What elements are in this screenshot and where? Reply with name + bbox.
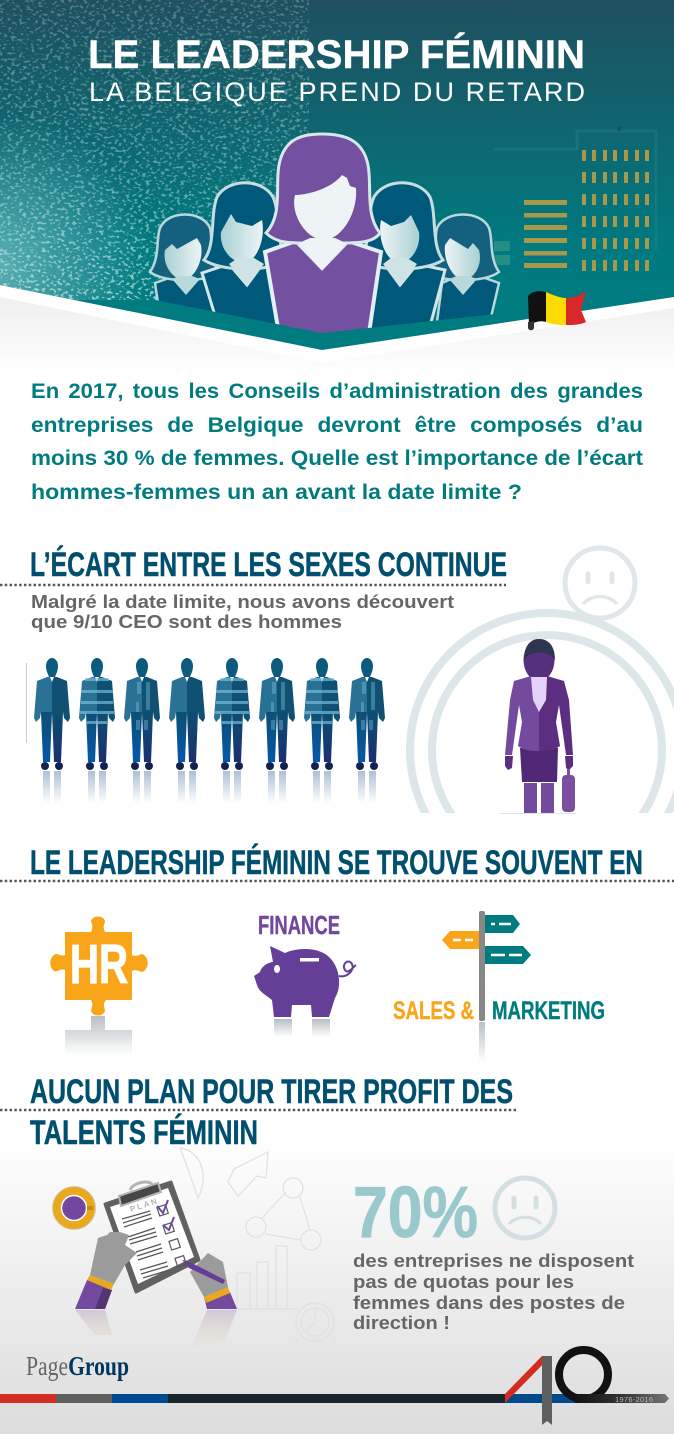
panel: no plan (0, 1073, 634, 1350)
stat description: pas de quotas pour les (353, 1272, 574, 1292)
footer ribbon with 40 years logo (0, 1350, 669, 1425)
label: sales: SALES & (393, 997, 474, 1025)
icon: rings (406, 609, 674, 813)
intro text: En 2017, tous les Conseils d’administration des grandes (31, 380, 643, 403)
subheading: que 9/10 CEO sont des hommes (31, 612, 342, 632)
stat description (353, 1251, 634, 1333)
heading: TALENTS FÉMININ (30, 1112, 258, 1152)
stat description: direction ! (353, 1313, 450, 1333)
icon: coffee cup (52, 1186, 96, 1230)
center woman (265, 134, 381, 340)
icon: clipboard with plan (105, 1182, 199, 1292)
icon: piggy bank (254, 946, 356, 1037)
left woman (202, 183, 295, 345)
stat description: femmes dans des postes de (353, 1293, 625, 1313)
header white band (0, 285, 674, 363)
icon: group of women leaders (150, 134, 499, 345)
panel: where women lead (0, 842, 674, 1062)
far left woman (148, 213, 216, 312)
stat description: des entreprises ne disposent (353, 1251, 634, 1271)
intro text (31, 380, 643, 504)
icon: businesswoman (500, 639, 576, 814)
row of male CEOs (26, 658, 385, 803)
icon: Belgian flag (528, 291, 586, 330)
icon: signpost (442, 911, 531, 1062)
intro text: entreprises de Belgique devront être composés d’au (31, 414, 643, 437)
icon: office building (494, 127, 656, 271)
panel: header banner (0, 0, 674, 350)
footer ribbon with 40 years logo: 1976-2016 (615, 1395, 653, 1404)
intro text: hommes-femmes un an avant la date limite ? (31, 481, 522, 504)
subheading: Malgré la date limite, nous avons découvert (31, 592, 454, 612)
icon: HR puzzle piece: HR (70, 933, 128, 995)
icon: clipboard with plan: PLAN (129, 1196, 160, 1214)
subheading (31, 592, 454, 632)
icon: HR puzzle piece (50, 916, 148, 1055)
subtitle: LA BELGIQUE PREND DU RETARD (89, 77, 585, 107)
title: LE LEADERSHIP FÉMININ (88, 32, 585, 77)
right woman (350, 183, 445, 345)
icon: sad face (565, 548, 635, 618)
label: marketing: MARKETING (492, 997, 605, 1025)
label: finance: FINANCE (258, 910, 340, 940)
icon: sad face (495, 1178, 555, 1238)
faint background sketches (180, 1148, 336, 1342)
panel: gender gap (0, 545, 674, 814)
logo: PageGroup: PageGroup (26, 1351, 129, 1381)
intro text: moins 30 % de femmes. Quelle est l’importance de l’écart (31, 447, 643, 470)
stat: 70%: 70% (353, 1173, 478, 1253)
heading (0, 1073, 517, 1152)
far right woman (434, 213, 501, 320)
icon: hands (75, 1232, 237, 1350)
